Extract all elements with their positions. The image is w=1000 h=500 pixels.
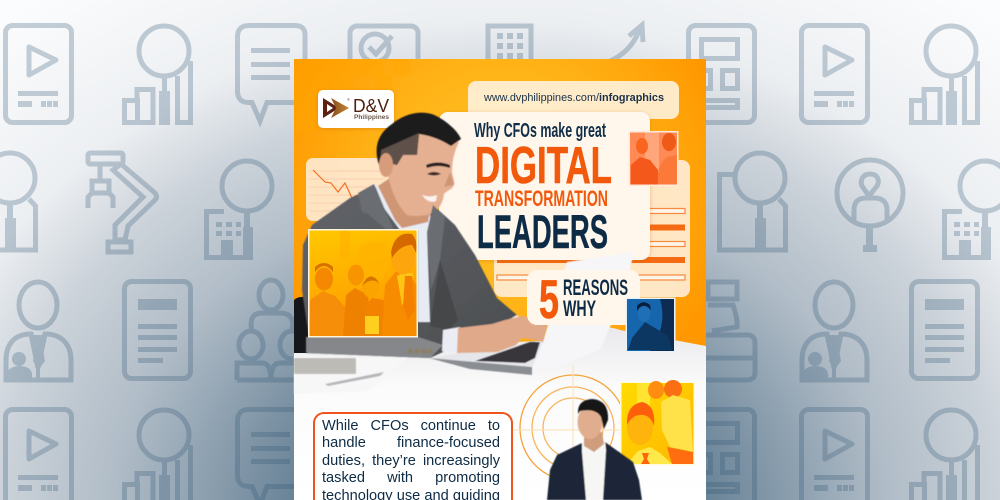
hair bbox=[578, 399, 608, 429]
icon: speech bubble bottom bbox=[238, 410, 305, 500]
man at laptop bbox=[302, 113, 547, 358]
logo wordmark: D&V bbox=[353, 96, 389, 116]
heading: leaders: LEADERS bbox=[477, 206, 608, 259]
photo: team tile bbox=[308, 229, 418, 338]
icon: speech bubble bbox=[238, 26, 305, 121]
icon: text document left bbox=[124, 282, 190, 378]
icon: growth arrow bbox=[608, 25, 643, 62]
ear bbox=[379, 153, 393, 177]
papers and tablet bbox=[294, 356, 407, 394]
URL text: www.dvphilippines.com/infographics bbox=[483, 92, 664, 104]
panel: main title card bbox=[439, 112, 650, 260]
smile bbox=[422, 195, 437, 202]
paragraph text: handle finance-focused bbox=[322, 435, 500, 451]
photo: office yellow tile bbox=[620, 380, 695, 466]
heading: digital: DIGITAL bbox=[475, 137, 612, 195]
icon: hand on stack bbox=[690, 282, 755, 380]
desk bbox=[294, 328, 706, 500]
icon: video document bottom left bbox=[6, 410, 72, 500]
jacket bbox=[302, 187, 517, 358]
icon: video document right bbox=[802, 26, 868, 122]
icon: magnifier building right bbox=[944, 161, 1000, 259]
team people silhouettes bbox=[310, 234, 416, 336]
sleeve buttons bbox=[407, 348, 433, 354]
photo: handshake tile bbox=[628, 131, 678, 186]
icon: building bbox=[488, 26, 531, 116]
icon: person in suit left bbox=[6, 282, 71, 381]
photo: blue meeting tile bbox=[626, 298, 676, 352]
icon: magnifier chart bottom right bbox=[912, 410, 978, 500]
icon: layout document bottom bbox=[688, 410, 754, 500]
icon: text document right bbox=[912, 282, 978, 378]
logo badge: ® bbox=[347, 97, 350, 102]
hair top bbox=[377, 113, 461, 165]
pixel squares bbox=[294, 59, 410, 131]
icon: magnifier document right bbox=[720, 153, 786, 252]
icon: person in suit right bbox=[802, 282, 867, 381]
icon: video document bbox=[6, 26, 72, 122]
poster orange background bbox=[294, 59, 706, 500]
big number five: 5 bbox=[539, 268, 559, 330]
neck and face bbox=[584, 432, 604, 452]
icon: video document bottom right bbox=[802, 410, 868, 500]
eyebrow and eye bbox=[426, 162, 450, 168]
white shirt bbox=[582, 440, 606, 500]
panel: poster bbox=[294, 59, 706, 500]
icon: robot arm bbox=[88, 153, 156, 252]
paragraph text bbox=[322, 418, 500, 500]
icon: layout document bbox=[688, 26, 754, 122]
panel: faded line chart left bbox=[306, 158, 396, 221]
nose shadow bbox=[444, 172, 454, 187]
keyboard bbox=[475, 342, 540, 363]
panel: 5 reasons why bbox=[527, 268, 640, 330]
neck bbox=[378, 178, 430, 228]
laptop bbox=[429, 252, 634, 375]
logo badge: Philippines bbox=[354, 114, 389, 121]
navy jacket bbox=[547, 442, 642, 500]
logo badge bbox=[318, 90, 394, 128]
laptop underside bbox=[429, 358, 532, 375]
reasons text: REASONS bbox=[563, 275, 628, 300]
laptop screen back bbox=[532, 252, 634, 375]
paragraph text: While CFOs continue to bbox=[322, 418, 500, 434]
face bbox=[388, 134, 459, 216]
why text: WHY bbox=[563, 296, 596, 321]
panel: faded report right bbox=[494, 160, 690, 297]
icon: person magnifier bbox=[837, 160, 903, 252]
icon: checklist magnifier bbox=[350, 26, 418, 116]
second man in navy suit bbox=[547, 399, 642, 500]
hands bbox=[457, 316, 547, 353]
icon: magnifier chart bottom bbox=[124, 410, 190, 500]
icon: magnifier chart right bbox=[912, 26, 978, 125]
logo mark bbox=[323, 98, 339, 118]
chair bbox=[294, 297, 308, 353]
icon: magnifier over bar chart bbox=[124, 26, 190, 125]
lapels bbox=[358, 184, 445, 290]
paragraph text: tasked with promoting bbox=[322, 470, 500, 486]
icon: magnifier document left bbox=[0, 153, 36, 252]
paragraph text: duties, they’re increasingly bbox=[322, 453, 500, 469]
jacket shade bbox=[430, 260, 458, 330]
shirt bbox=[374, 183, 431, 322]
panel: URL bar bbox=[468, 81, 679, 119]
jacket lower hem bbox=[306, 337, 443, 358]
panel: intro paragraph bbox=[313, 412, 513, 500]
heading: transformation: TRANSFORMATION bbox=[475, 186, 608, 211]
hair side fade bbox=[380, 133, 419, 165]
icon: group of people bbox=[237, 280, 304, 380]
heading: why CFOs: Why CFOs make great bbox=[474, 120, 606, 142]
cuffs bbox=[442, 315, 520, 353]
target circles bbox=[508, 365, 626, 481]
icon: magnifier building left bbox=[206, 161, 272, 259]
laptop base bbox=[429, 340, 544, 367]
